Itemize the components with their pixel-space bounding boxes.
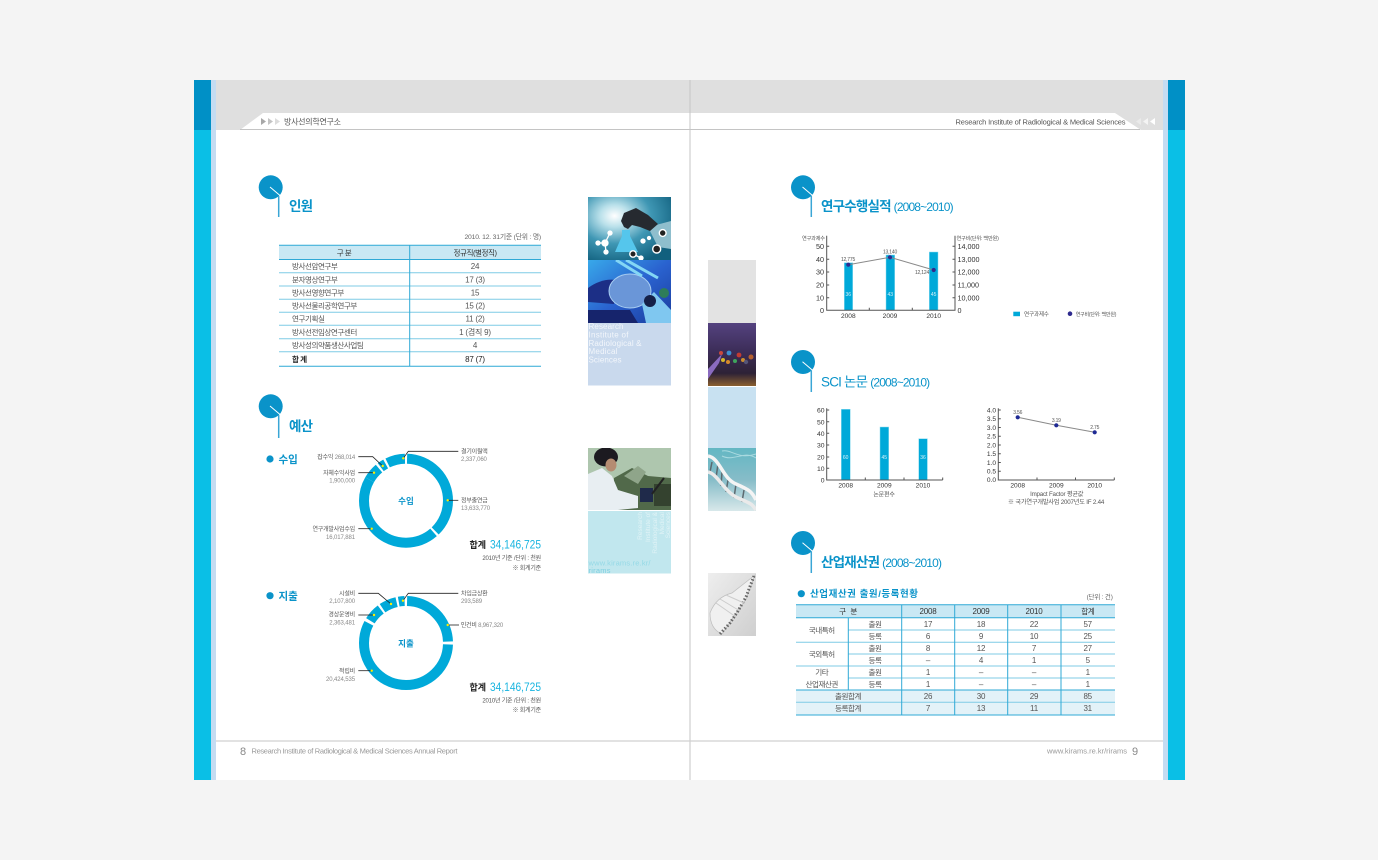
line chart: impact factor: 3.0	[987, 425, 996, 432]
text panel: institute name	[588, 322, 671, 386]
expense donut chart: 2,363,481	[329, 620, 356, 626]
IP table: 5	[1086, 656, 1091, 665]
income label	[266, 453, 298, 466]
combo chart: projects and funding: 연구과제수	[802, 234, 825, 242]
IP table	[796, 605, 1115, 715]
expense donut chart: 인건비 8,967,320	[461, 621, 504, 629]
header left: breadcrumb	[261, 116, 341, 126]
IP table: 1	[1086, 680, 1091, 689]
bar chart: paper counts: 60	[817, 408, 825, 415]
heading: intellectual property: 산업재산권 (2008~2010)	[821, 555, 942, 570]
text panel: website: Sciences	[665, 511, 672, 538]
personnel table: 15	[471, 288, 480, 298]
sub-heading: IP applications and registrations: (단위 : 건)	[1087, 592, 1113, 601]
income donut chart: 16,017,881	[326, 535, 356, 541]
header right: institute name: Research Institute of Radiological & Medical Sciences	[956, 118, 1126, 126]
IP table: 4	[979, 656, 984, 665]
bar chart: paper counts: 20	[817, 455, 825, 462]
IP table: 26	[924, 692, 933, 701]
line chart: impact factor: 3.19	[1052, 418, 1061, 424]
combo chart: projects and funding: 40	[816, 255, 824, 264]
IP table: 국내특허	[809, 626, 835, 635]
line chart: impact factor: 3.56	[1013, 410, 1023, 416]
IP table: 합계	[1081, 606, 1095, 616]
bar chart: paper counts: 50	[817, 419, 825, 426]
text panel: website: Radiological &	[652, 511, 659, 554]
income total: 2010년 기준 /단위 : 천원	[482, 554, 541, 562]
IP table: 11	[1030, 704, 1039, 713]
bar chart: paper counts: 2010	[916, 483, 931, 490]
line chart: impact factor: 3.5	[987, 416, 996, 423]
income donut chart: 연구개발사업수입	[312, 525, 355, 533]
IP table: –	[979, 668, 984, 677]
combo chart: projects and funding: 2009	[883, 313, 898, 320]
personnel table: 87 (7)	[465, 355, 485, 364]
combo chart: projects and funding: 14,000	[958, 242, 979, 251]
IP table: –	[1032, 680, 1037, 689]
personnel table: 방사성의약품생산사업팀	[292, 340, 363, 350]
line chart: impact factor: 2.0	[987, 442, 996, 449]
IP table: 1	[926, 680, 931, 689]
IP table: 85	[1083, 692, 1093, 701]
bar chart: paper counts: 10	[817, 466, 825, 473]
personnel table: 2010. 12. 31기준 (단위 : 명)	[464, 232, 541, 241]
line chart: impact factor	[987, 407, 1114, 506]
combo chart legend	[1013, 310, 1117, 318]
heading: SCI papers: SCI 논문 (2008~2010)	[821, 374, 930, 390]
combo chart: projects and funding: 13,140	[883, 250, 897, 256]
combo chart: projects and funding: 12,775	[841, 257, 855, 263]
bar chart: paper counts: 60	[843, 455, 849, 461]
personnel table	[279, 232, 541, 366]
expense donut chart: 지출	[398, 638, 414, 648]
income total: ※ 회계기준	[512, 564, 542, 572]
line chart: impact factor: 4.0	[987, 407, 996, 414]
income donut chart: 2,337,060	[461, 457, 488, 463]
expense total: 2010년 기준 /단위 : 천원	[482, 696, 541, 704]
right edge strip	[1163, 80, 1185, 780]
sub-heading: IP applications and registrations	[798, 588, 1113, 601]
bar chart: paper counts: 45	[882, 455, 887, 461]
expense label	[266, 591, 298, 603]
footer left: Research Institute of Radiological & Medical Sciences Annual Report	[252, 746, 458, 756]
IP table: 13	[977, 704, 986, 713]
text panel: website: Research	[637, 512, 644, 540]
IP table: 18	[977, 620, 986, 629]
income total: 34,146,725	[490, 538, 541, 552]
line chart: impact factor: 1.5	[987, 451, 996, 458]
combo chart: projects and funding: 36	[846, 292, 851, 298]
text panel: website: Institute of	[645, 512, 652, 542]
income donut chart: 1,900,000	[329, 478, 356, 484]
IP table: 57	[1083, 620, 1093, 629]
combo chart: projects and funding	[802, 234, 999, 320]
left edge strip	[194, 80, 216, 780]
IP table: 10	[1030, 632, 1039, 641]
combo chart: projects and funding: 50	[816, 242, 824, 251]
IP table: 30	[977, 692, 986, 701]
IP table: –	[979, 680, 984, 689]
IP table: 기타	[815, 668, 829, 677]
heading: personnel: 인원	[289, 199, 313, 214]
combo chart: projects and funding: 45	[931, 292, 937, 298]
combo chart: projects and funding: 13,000	[958, 255, 979, 264]
personnel table: 4	[473, 341, 478, 350]
text panel: institute name: Institute of	[588, 330, 629, 339]
income donut chart: 정부출연금	[461, 496, 488, 504]
income total	[470, 538, 542, 572]
personnel table: 방사선암연구부	[292, 261, 338, 271]
personnel table: 방사선전임상연구센터	[292, 327, 357, 337]
bar chart: paper counts: 30	[817, 443, 825, 450]
bar chart: paper counts: 2009	[877, 483, 892, 490]
expense donut chart: 시설비	[339, 590, 355, 598]
income donut chart: 수입	[398, 496, 414, 506]
personnel table: 합 계	[292, 354, 307, 364]
photo: molecule	[708, 323, 756, 386]
expense donut chart: 적립비	[339, 667, 355, 675]
personnel table: 1 (겸직 9)	[459, 327, 491, 337]
income total: 합계	[470, 539, 486, 550]
text panel: website: Medical	[659, 511, 666, 534]
personnel table: 연구기획실	[292, 314, 325, 324]
heading: budget	[259, 394, 314, 438]
personnel table: 방사선물리공학연구부	[292, 301, 357, 311]
line chart: impact factor: ※ 국가연구개발사업 2007년도 IF 2.44	[1008, 498, 1105, 506]
expense total: 34,146,725	[490, 680, 541, 694]
footer left: 8	[240, 746, 246, 758]
text panel: website: rirams	[588, 566, 611, 575]
footer right: 9	[1132, 746, 1138, 758]
IP table: 29	[1030, 692, 1039, 701]
IP table: 12	[977, 644, 986, 653]
combo chart: projects and funding: 연구비(단위: 백만원)	[956, 234, 999, 242]
line chart: impact factor: 2008	[1010, 483, 1025, 490]
IP table: 등록합계	[835, 703, 861, 713]
heading: intellectual property	[791, 531, 942, 573]
combo chart: projects and funding: 2008	[841, 313, 856, 320]
text panel: website	[588, 511, 672, 575]
line chart: impact factor: 1.0	[987, 460, 996, 467]
footer right: www.kirams.re.kr/rirams	[1046, 746, 1127, 756]
IP table: 2009	[972, 607, 990, 616]
header left: breadcrumb: 방사선의학연구소	[284, 116, 341, 126]
text panel: institute name: Sciences	[588, 356, 622, 364]
light blue panel	[708, 387, 756, 448]
bar chart: paper counts: 36	[920, 455, 926, 461]
IP table: 1	[1032, 656, 1037, 665]
text panel: institute name: Radiological &	[588, 339, 642, 348]
combo chart: projects and funding: 10	[816, 293, 824, 302]
income donut chart: 13,633,770	[461, 506, 491, 512]
expense donut chart: 2,107,800	[329, 599, 356, 605]
line chart: impact factor: 2.5	[987, 434, 996, 441]
IP table: 출원	[869, 667, 882, 677]
income label: 수입	[278, 453, 298, 466]
header band	[216, 80, 1163, 130]
combo chart: projects and funding: 12,124	[915, 270, 929, 276]
IP table: 출원	[869, 619, 882, 629]
combo chart: projects and funding: 12,000	[958, 268, 979, 277]
photo: researcher in lab coat	[588, 448, 671, 510]
IP table: –	[1032, 668, 1037, 677]
heading: personnel	[259, 175, 313, 217]
IP table: 구 분	[839, 607, 857, 616]
heading: SCI papers	[791, 350, 930, 392]
bar chart: paper counts	[817, 408, 943, 498]
photo: blue laboratory dish	[588, 260, 671, 323]
combo chart legend: 연구비(단위: 백만원)	[1076, 311, 1117, 318]
income donut chart: 자체수익사업	[323, 469, 355, 477]
bar chart: paper counts: 2008	[838, 483, 853, 490]
IP table: 산업재산권	[805, 679, 838, 689]
sub-heading: IP applications and registrations: 산업재산권 출원/등록현황	[810, 588, 918, 600]
line chart: impact factor: 0.0	[987, 477, 996, 484]
line chart: impact factor: 0.5	[987, 469, 996, 476]
income donut chart: 잡수익 268,014	[317, 453, 356, 461]
personnel table: 11 (2)	[465, 315, 485, 324]
heading: research performance: 연구수행실적 (2008~2010)	[821, 199, 954, 214]
expense donut chart: 293,589	[461, 599, 483, 605]
combo chart: projects and funding: 0	[958, 306, 962, 315]
IP table: 등록	[869, 680, 882, 689]
combo chart: projects and funding: 43	[888, 292, 893, 298]
line chart: impact factor: 2.75	[1090, 425, 1100, 431]
combo chart: projects and funding: 0	[820, 306, 824, 315]
IP table: –	[926, 656, 931, 665]
bar chart: paper counts: 0	[821, 478, 825, 485]
text panel: website: www.kirams.re.kr/	[588, 558, 651, 568]
IP table: 7	[1032, 644, 1037, 653]
IP table: 출원	[869, 643, 882, 653]
expense total: 합계	[470, 681, 486, 692]
photo: DNA helix teal	[708, 448, 756, 511]
IP table: 8	[926, 644, 931, 653]
expense donut chart: 20,424,535	[326, 677, 356, 683]
combo chart legend: 연구과제수	[1024, 310, 1049, 318]
line chart: impact factor: Impact Factor 평균값	[1030, 490, 1084, 498]
combo chart: projects and funding: 20	[816, 281, 824, 290]
IP table: 등록	[869, 656, 882, 665]
footer right	[1046, 746, 1138, 758]
IP table: 2010	[1026, 607, 1043, 616]
income donut chart: 결기이월액	[461, 448, 488, 456]
line chart: impact factor: 2010	[1087, 483, 1102, 490]
expense donut chart: 차입금상환	[461, 590, 488, 598]
IP table: 1	[1086, 668, 1091, 677]
IP table: 국외특허	[809, 649, 835, 659]
combo chart: projects and funding: 11,000	[958, 281, 979, 290]
IP table: 1	[926, 668, 931, 677]
IP table: 7	[926, 704, 931, 713]
combo chart: projects and funding: 10,000	[958, 293, 979, 302]
IP table: 9	[979, 632, 984, 641]
IP table: 27	[1083, 644, 1093, 653]
combo chart: projects and funding: 2010	[926, 313, 941, 320]
IP table: 등록	[869, 632, 882, 641]
IP table: 출원합계	[835, 691, 861, 701]
expense donut chart	[326, 590, 504, 685]
IP table: 22	[1030, 620, 1039, 629]
IP table: 6	[926, 632, 931, 641]
IP table: 31	[1083, 704, 1093, 713]
expense total: ※ 회계기준	[512, 706, 542, 714]
IP table: 25	[1083, 632, 1093, 641]
personnel table: 24	[471, 262, 480, 271]
personnel table: 17 (3)	[465, 275, 485, 284]
photo: flask and gloved hand	[588, 197, 671, 260]
personnel table: 방사선영향연구부	[292, 288, 344, 298]
expense total	[470, 680, 542, 714]
photo: gray DNA model	[708, 573, 756, 636]
expense donut chart: 경상운영비	[328, 610, 355, 618]
personnel table: 15 (2)	[465, 302, 485, 311]
personnel table: 정규직(별정직)	[454, 248, 497, 258]
gray blank panel	[708, 260, 756, 323]
combo chart: projects and funding: 30	[816, 268, 824, 277]
brochure spread	[194, 80, 1185, 780]
heading: budget: 예산	[289, 419, 314, 434]
text panel: institute name: Research	[588, 322, 624, 331]
personnel table: 분자영상연구부	[292, 274, 338, 284]
IP table: 17	[924, 620, 933, 629]
IP table: 2008	[920, 607, 937, 616]
expense label: 지출	[278, 591, 298, 603]
bar chart: paper counts: 논문편수	[873, 490, 895, 498]
line chart: impact factor: 2009	[1049, 483, 1064, 490]
bar chart: paper counts: 40	[817, 431, 825, 438]
income donut chart	[312, 448, 491, 543]
text panel: institute name: Medical	[588, 347, 618, 356]
heading: research performance	[791, 175, 954, 217]
personnel table: 구 분	[337, 248, 352, 258]
